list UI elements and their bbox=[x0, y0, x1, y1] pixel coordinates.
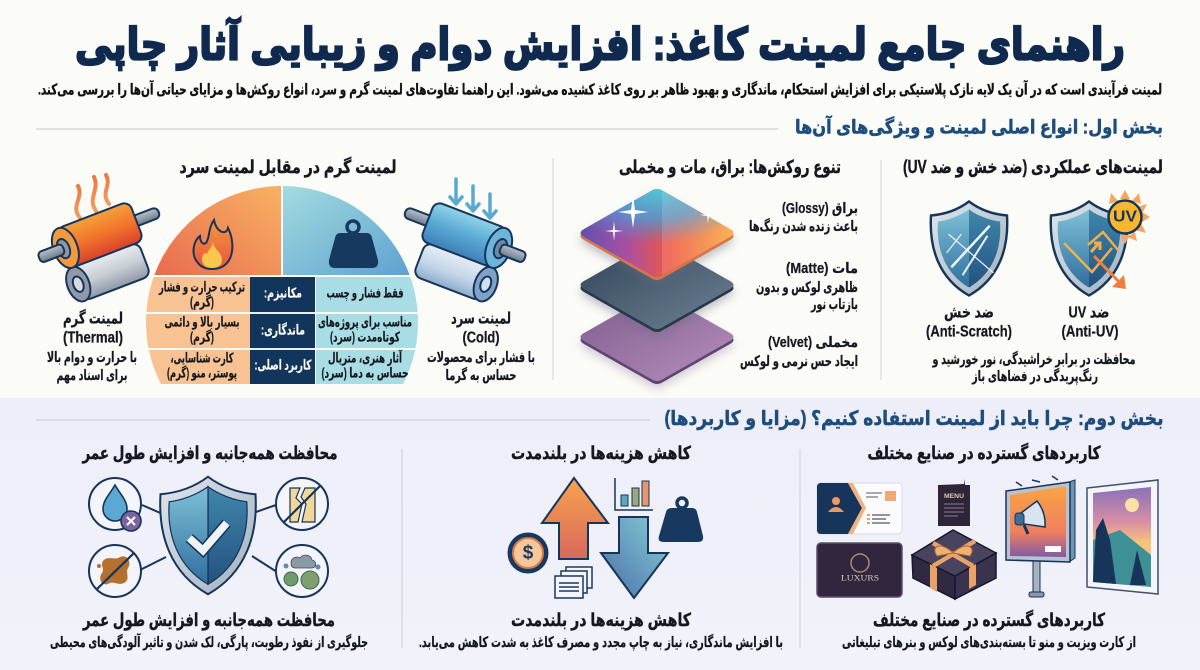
table: row labels: ماندگاری: bbox=[261, 322, 305, 338]
label: thermal laminate bbox=[47, 308, 137, 384]
label: anti-UV bbox=[1062, 304, 1118, 340]
comparison dome bbox=[140, 180, 426, 384]
icon: paper stack bbox=[555, 567, 592, 598]
panel: functional laminates bbox=[903, 157, 1163, 385]
icon: bar chart bbox=[615, 478, 653, 510]
panel: cost reduction bbox=[419, 443, 783, 651]
table: hot column: (گرم) bbox=[190, 294, 214, 310]
connector lines bbox=[140, 505, 277, 572]
heading: cost: کاهش هزینه‌ها در بلندمدت bbox=[511, 443, 691, 464]
label: glossy: براق (Glossy) bbox=[782, 201, 858, 217]
subheading: applications: کاربردهای گسترده در صنایع مختلف bbox=[873, 609, 1105, 631]
icon: anti-scratch shield bbox=[931, 202, 1007, 296]
label: matte: مات (Matte) bbox=[786, 261, 858, 277]
icon: cold pressure arrows bbox=[450, 179, 496, 218]
label: cold laminate: (Cold) bbox=[462, 330, 500, 346]
icon: luxury card bbox=[817, 543, 902, 597]
label: anti-scratch: ضد خش bbox=[944, 304, 994, 322]
icon: gift box bbox=[912, 530, 996, 599]
label: thermal laminate: لمینت گرم bbox=[63, 308, 123, 328]
text: functional description: رنگ‌پریدگی در فضاهای باز bbox=[971, 367, 1098, 385]
label: anti-scratch bbox=[926, 304, 1012, 340]
panel: finishes bbox=[580, 157, 858, 388]
icon: heat steam bbox=[76, 175, 109, 218]
icon: torn paper bbox=[276, 478, 328, 530]
icon: weight bbox=[659, 498, 703, 542]
icon: weight bbox=[329, 221, 378, 268]
table: hot column: بسیار بالا و دائمی bbox=[164, 314, 240, 330]
label: thermal laminate: برای اسناد مهم bbox=[56, 368, 128, 384]
icon: anti-UV shield bbox=[1051, 190, 1150, 296]
icon: menu bbox=[938, 479, 970, 526]
table: row labels bbox=[254, 286, 312, 372]
table: hot column: کارت شناسایی، bbox=[170, 350, 234, 366]
icon: thermal rollers bbox=[32, 192, 166, 305]
label: matte: ظاهری لوکس و بدون bbox=[756, 280, 858, 296]
label: velvet: ایجاد حس نرمی و لوکس bbox=[740, 354, 858, 370]
icon: water drop bbox=[89, 478, 141, 531]
table: hot column bbox=[158, 280, 245, 382]
label: velvet: مخملی (Velvet) bbox=[768, 335, 858, 351]
label: matte bbox=[756, 261, 858, 313]
subheading: cost: کاهش هزینه‌ها در بلندمدت bbox=[511, 610, 691, 631]
icon: down arrow bbox=[601, 517, 668, 598]
label: glossy: باعث زنده شدن رنگ‌ها bbox=[749, 217, 858, 235]
icon: matte layer bbox=[580, 241, 734, 336]
panel: protection bbox=[50, 443, 368, 651]
icon: luxury card: LUXURS bbox=[841, 574, 879, 582]
label: matte: بازتاب نور bbox=[810, 297, 858, 313]
label: anti-UV: ضد UV bbox=[1068, 304, 1110, 322]
icon: up arrow bbox=[542, 478, 608, 559]
table: cold column: مناسب برای پروژه‌های bbox=[318, 314, 412, 330]
table: cold column: کوتاه‌مدت (سرد) bbox=[330, 330, 400, 344]
icon: coin bbox=[508, 532, 548, 574]
label: anti-UV: (Anti-UV) bbox=[1062, 324, 1118, 340]
label: cold laminate: لمینت سرد bbox=[451, 310, 511, 328]
table: cold column bbox=[318, 286, 412, 380]
icon: stain bbox=[89, 545, 141, 597]
text: cost description: با افزایش ماندگاری، نیاز به چاپ مجدد و مصرف کاغذ به شدت کاهش می‌یابد. bbox=[419, 633, 783, 651]
table: row labels: مکانیزم: bbox=[264, 286, 302, 302]
table: hot column: ترکیب حرارت و فشار bbox=[158, 280, 245, 294]
table: hot column: (گرم) bbox=[190, 328, 214, 346]
subheading: protection: محافظت همه‌جانبه و افزایش طول عمر bbox=[82, 610, 335, 631]
panel: hot vs cold laminate bbox=[32, 156, 535, 384]
table: cold column: حساس به دما (سرد) bbox=[322, 366, 408, 380]
label: cold laminate: با فشار برای محصولات bbox=[427, 350, 535, 366]
label: thermal laminate: با حرارت و دوام بالا bbox=[47, 350, 137, 366]
icon: business card bbox=[817, 483, 902, 534]
table: cold column: فقط فشار و چسب bbox=[326, 286, 404, 300]
table: hot column: پوستر، منو (گرم) bbox=[167, 364, 237, 382]
label: thermal laminate: (Thermal) bbox=[63, 330, 123, 346]
panel: applications bbox=[817, 442, 1158, 651]
icon: cold rollers bbox=[398, 192, 532, 305]
label: anti-scratch: (Anti-Scratch) bbox=[926, 324, 1012, 340]
table: row labels: کاربرد اصلی: bbox=[254, 358, 312, 372]
label: glossy bbox=[749, 201, 858, 235]
heading: hot vs cold: لمینت گرم در مقابل لمینت سرد bbox=[180, 156, 396, 178]
icon: glossy layer bbox=[580, 189, 734, 284]
label: cold laminate: حساس به گرما bbox=[446, 366, 516, 384]
icon: fire bbox=[194, 220, 232, 269]
text: functional description bbox=[932, 350, 1136, 385]
text: protection description: جلوگیری از نفوذ رطوبت، پارگی، لک شدن و تاثیر آلودگی‌های محیطی bbox=[50, 633, 368, 651]
icon: pollution bbox=[276, 545, 328, 597]
label: velvet bbox=[740, 335, 858, 370]
icon: velvet layer bbox=[580, 293, 734, 388]
label: cold laminate bbox=[427, 310, 535, 384]
icon: UV sun: UV bbox=[1113, 208, 1137, 226]
heading: protection: محافظت همه‌جانبه و افزایش طول عمر bbox=[82, 443, 338, 464]
icon: coin: $ bbox=[523, 542, 534, 564]
icon: menu: MENU bbox=[944, 494, 964, 500]
heading: applications: کاربردهای گسترده در صنایع مختلف bbox=[868, 442, 1101, 464]
icon: billboard bbox=[1006, 476, 1075, 597]
table: cold column: آثار هنری، متریال bbox=[328, 350, 402, 366]
icon: framed poster bbox=[1087, 480, 1158, 594]
heading: finishes: تنوع روکش‌ها: براق، مات و مخملی bbox=[619, 157, 841, 178]
icon: central shield bbox=[160, 477, 256, 594]
